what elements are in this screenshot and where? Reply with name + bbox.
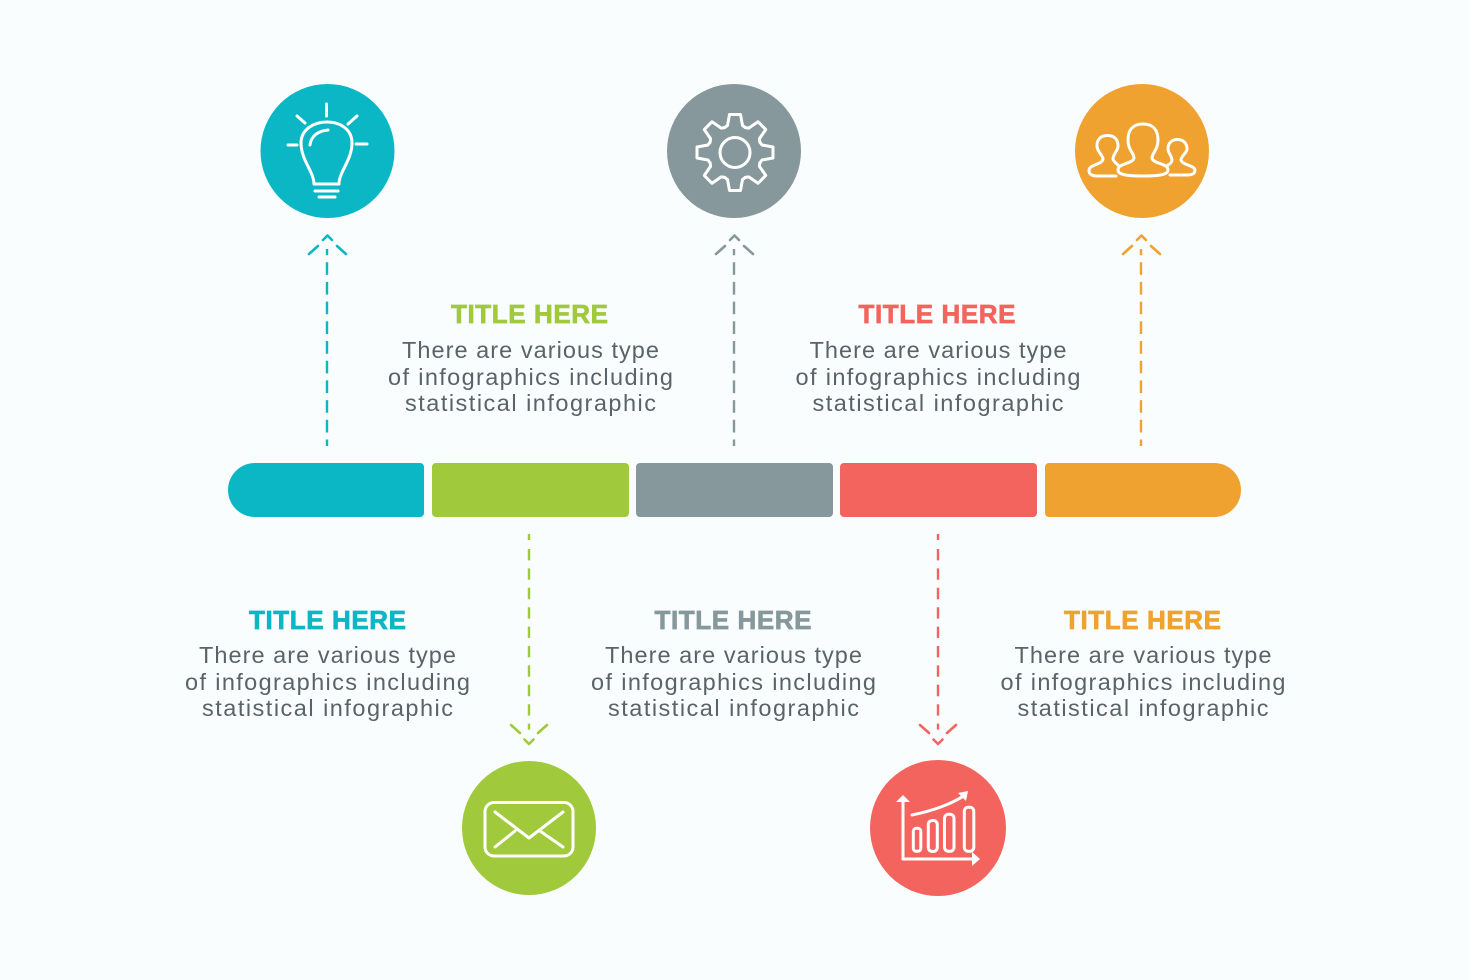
text block bbox=[796, 337, 1080, 416]
heading: TITLE HERE bbox=[654, 605, 812, 635]
heading: TITLE HERE bbox=[249, 605, 406, 635]
icon: envelope bbox=[462, 761, 596, 895]
icon: people bbox=[1075, 84, 1209, 218]
heading: TITLE HERE bbox=[858, 299, 1016, 329]
text block bbox=[591, 642, 876, 721]
text block: of infographics including bbox=[1000, 669, 1286, 695]
bar segment: red bbox=[840, 463, 1037, 517]
text block: statistical infographic bbox=[202, 695, 453, 721]
text block: statistical infographic bbox=[812, 390, 1064, 416]
bar segment: green bbox=[432, 463, 629, 517]
arrow: up bbox=[716, 236, 753, 446]
panel: step 5 orange bbox=[1000, 84, 1286, 721]
bar segment: orange bbox=[1045, 463, 1241, 517]
panel: step 4 red bbox=[796, 299, 1080, 896]
text block: of infographics including bbox=[796, 364, 1080, 390]
text block: There are various type bbox=[402, 337, 659, 363]
bar segment: grey bbox=[636, 463, 833, 517]
icon: bar chart bbox=[870, 760, 1006, 896]
text block: There are various type bbox=[1014, 642, 1272, 668]
text block: of infographics including bbox=[591, 669, 876, 695]
heading: TITLE HERE bbox=[1064, 605, 1221, 635]
text block bbox=[1000, 642, 1286, 721]
arrow: up bbox=[1123, 236, 1160, 446]
text block bbox=[185, 642, 470, 721]
icon: gear bbox=[667, 84, 801, 218]
text block bbox=[388, 337, 673, 416]
text block: of infographics including bbox=[185, 669, 470, 695]
text block: statistical infographic bbox=[405, 390, 656, 416]
text block: There are various type bbox=[605, 642, 862, 668]
timeline bar bbox=[228, 463, 1241, 517]
text block: statistical infographic bbox=[1018, 695, 1269, 721]
arrow: down bbox=[511, 534, 547, 744]
icon: light bulb bbox=[260, 84, 394, 218]
text block: statistical infographic bbox=[608, 695, 859, 721]
text block: There are various type bbox=[810, 337, 1066, 363]
bar segment: teal bbox=[228, 463, 424, 517]
arrow: down bbox=[920, 534, 956, 744]
text block: There are various type bbox=[199, 642, 456, 668]
panel: step 1 teal bbox=[185, 84, 470, 721]
panel: step 2 green bbox=[388, 299, 673, 895]
heading: TITLE HERE bbox=[451, 299, 608, 329]
arrow: up bbox=[309, 236, 346, 446]
panel: step 3 grey bbox=[591, 84, 876, 721]
text block: of infographics including bbox=[388, 364, 673, 390]
